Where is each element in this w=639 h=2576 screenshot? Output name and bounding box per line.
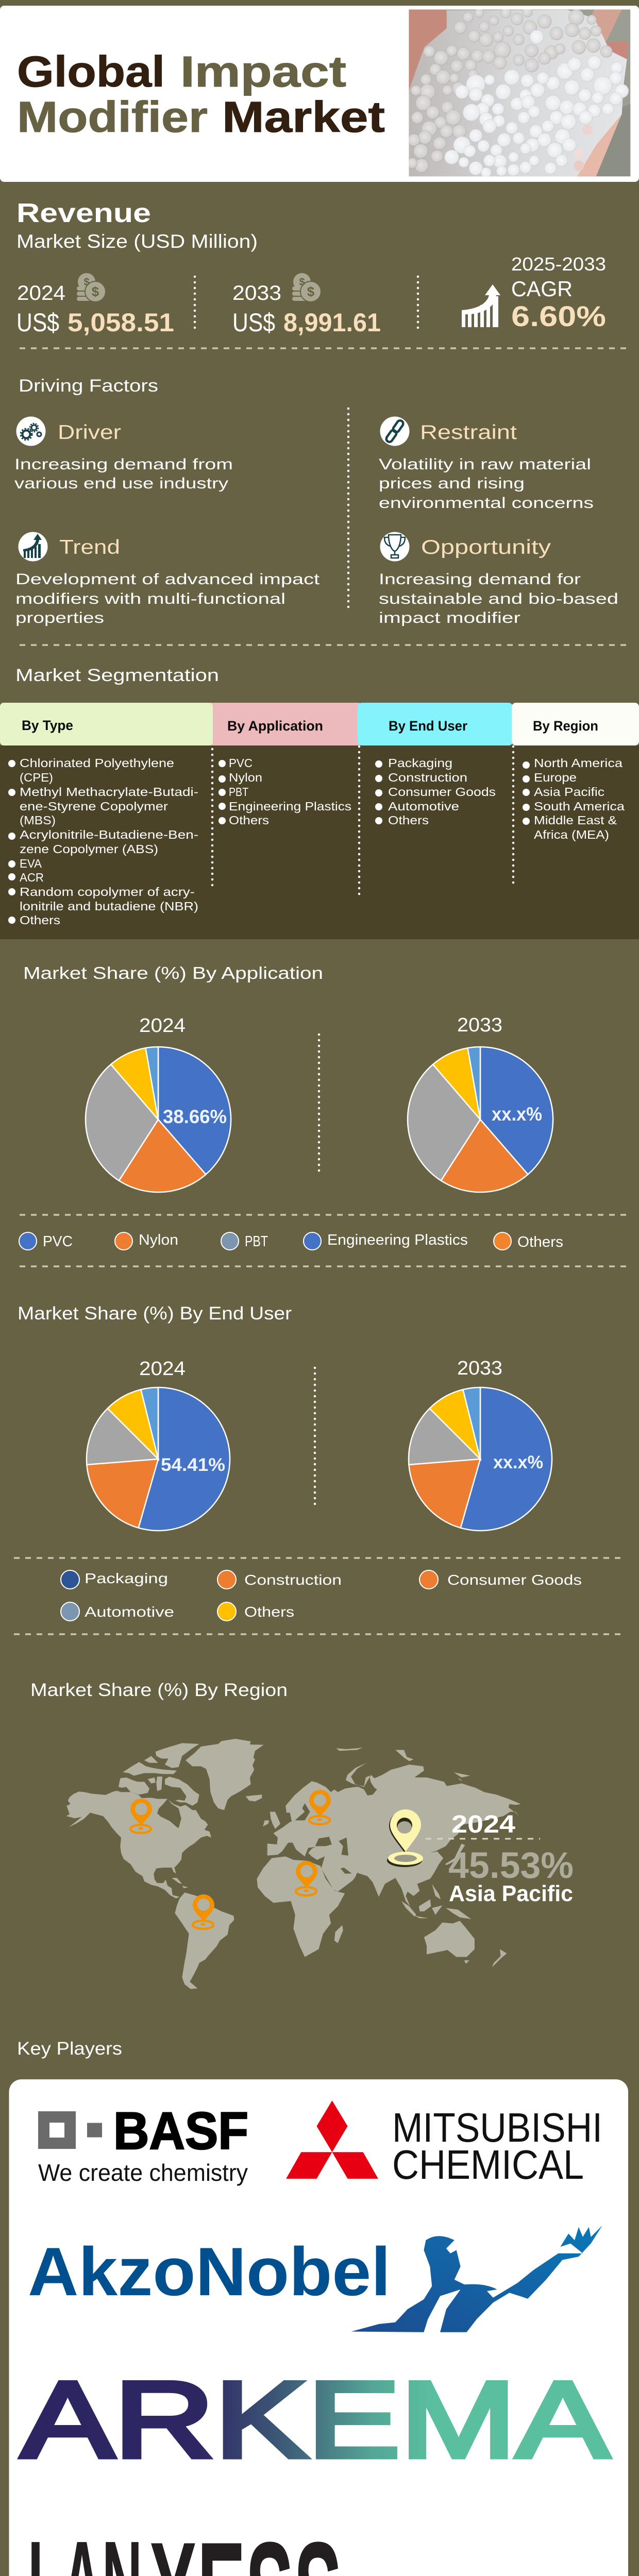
logo: Mitsubishi Chemical: MITSUBISHI	[392, 2105, 602, 2150]
text: opportunity body: sustainable and bio-based	[379, 590, 618, 607]
heading: by end user: Market Share (%) By End User	[18, 1303, 292, 1324]
column: by application: PVC	[229, 756, 253, 770]
panel: market share by region	[30, 1680, 574, 1989]
pie chart: application 2024: 38.66%	[163, 1106, 227, 1127]
icon: trend	[19, 532, 47, 562]
stat: 2024 revenue: 5,058.51	[68, 308, 174, 337]
pin: middle east and africa	[296, 1861, 317, 1895]
text: trend body: Development of advanced impact	[15, 571, 320, 588]
pie chart: end user 2033	[409, 1387, 552, 1531]
stat: 2033 revenue: 8,991.61	[283, 308, 381, 337]
pin: europe	[309, 1790, 331, 1824]
card: logos	[9, 2079, 628, 2576]
icon: coins 2033: $	[299, 277, 305, 288]
heading: revenue: Revenue	[16, 198, 151, 228]
column: by type: ACR	[20, 871, 44, 884]
panel: key players	[9, 2039, 628, 2576]
pin: north america	[130, 1799, 152, 1833]
panel: driving factors	[14, 376, 618, 626]
column: by end user: Automotive	[388, 800, 459, 813]
heading: market segmentation: Market Segmentation	[15, 666, 219, 685]
legend: application: Engineering Plastics	[327, 1232, 468, 1248]
stat: CAGR: CAGR	[511, 277, 573, 301]
column: by end user: Others	[388, 814, 429, 827]
text: driver body: Increasing demand from	[14, 456, 233, 473]
world map	[66, 1739, 521, 1989]
text: restraint body	[379, 456, 594, 512]
stat: 2033 revenue: US$	[232, 308, 275, 337]
panel: market segmentation	[0, 666, 639, 939]
logo: Mitsubishi Chemical	[286, 2100, 602, 2188]
pin: asia pacific highlighted	[387, 1809, 423, 1867]
panel: market share by end user	[14, 1303, 624, 1621]
callout: asia pacific share: 45.53%	[448, 1845, 574, 1886]
column: by type: (MBS)	[20, 814, 56, 827]
title	[17, 47, 385, 141]
column: by region: Middle East &	[534, 814, 617, 827]
label: driver: Driver	[58, 421, 121, 444]
column: by region: By Region	[533, 718, 598, 734]
photo: white polymer pellets in a hand	[407, 7, 630, 178]
logo: BASF	[38, 2102, 248, 2186]
column: by region	[523, 718, 625, 841]
panel: header	[0, 6, 639, 182]
column: by end user: Construction	[388, 771, 467, 784]
stat: CAGR: 6.60%	[511, 300, 606, 332]
column: by application: Nylon	[229, 771, 262, 784]
year label 2033: 2033	[457, 1014, 502, 1036]
stat: 2033 revenue	[232, 282, 381, 337]
hudson bay hole	[158, 1806, 181, 1828]
column: by region: Asia Pacific	[534, 785, 604, 799]
logo: Arkema: ARKEMA	[21, 2359, 609, 2480]
column: by end user: Packaging	[388, 756, 452, 770]
text: opportunity body	[379, 571, 618, 626]
stat: 2024 revenue: 2024	[17, 282, 65, 304]
year label 2024: 2024	[139, 1015, 186, 1037]
text: restraint body: Volatility in raw material	[379, 456, 591, 473]
logo: Lanxess	[28, 2510, 342, 2576]
column: by type: Random copolymer of acry-	[20, 885, 195, 899]
column: by type: Others	[20, 913, 60, 927]
icon: coins 2024: $	[83, 277, 90, 288]
stat: 2033 revenue: 2033	[232, 282, 281, 304]
icon: coins 2024	[77, 273, 106, 302]
stat: 2024 revenue	[16, 282, 174, 337]
logo: AkzoNobel: AkzoNobel	[28, 2234, 391, 2310]
pin: south america	[193, 1894, 214, 1929]
pie chart: end user 2024: 54.41%	[161, 1455, 225, 1475]
heading: by region: Market Share (%) By Region	[30, 1680, 288, 1700]
column: by type: Methyl Methacrylate-Butadi-	[20, 785, 198, 799]
column: by type: zene Copolymer (ABS)	[20, 842, 158, 856]
text: driver body: various end use industry	[14, 475, 228, 492]
callout: asia pacific share: Asia Pacific	[449, 1881, 573, 1906]
legend: end user: Consumer Goods	[447, 1572, 582, 1588]
stat: CAGR: 2025-2033	[511, 253, 606, 275]
heading: key players: Key Players	[17, 2039, 122, 2059]
column: by type: EVA	[20, 857, 42, 870]
column: by application: Engineering Plastics	[229, 800, 351, 813]
trend block	[15, 532, 320, 626]
text: driver body	[14, 456, 233, 492]
column: by type: By Type	[22, 718, 73, 733]
icon: coins 2033	[292, 273, 321, 302]
text: trend body	[15, 571, 320, 626]
year label 2024: 2024	[139, 1358, 186, 1380]
legend: end user: Automotive	[85, 1604, 174, 1620]
text: restraint body: environmental concerns	[379, 495, 594, 512]
column: by type	[8, 718, 198, 927]
column: by application: PBT	[229, 785, 248, 799]
text: opportunity body: impact modifier	[379, 609, 520, 626]
label: opportunity: Opportunity	[421, 536, 551, 558]
driver block	[14, 416, 233, 492]
callout: asia pacific share: 2024	[451, 1811, 515, 1838]
legend: application: Others	[517, 1234, 563, 1250]
stat: 2024 revenue: US$	[16, 308, 59, 337]
title: Impact	[180, 47, 346, 96]
legend: end user: Others	[244, 1604, 294, 1620]
label: trend: Trend	[59, 536, 120, 558]
column: by region: Africa (MEA)	[534, 828, 609, 841]
text: trend body: properties	[15, 609, 104, 626]
column: by type: lonitrile and butadiene (NBR)	[20, 900, 198, 913]
pie chart: application 2024	[86, 1047, 231, 1192]
column: by type: Acrylonitrile-Butadiene-Ben-	[20, 828, 198, 841]
callout: asia pacific share	[426, 1811, 574, 1906]
title: Market	[222, 93, 385, 141]
column: by region: North America	[534, 756, 623, 770]
column: by region: Europe	[534, 771, 577, 784]
legend: end user: Construction	[244, 1572, 342, 1588]
column: by application	[218, 718, 351, 827]
text: trend body: modifiers with multi-functional	[15, 590, 285, 607]
pie chart: end user 2024	[87, 1387, 230, 1531]
legend: application: PBT	[245, 1233, 268, 1250]
logo: Mitsubishi Chemical: CHEMICAL	[392, 2142, 584, 2188]
logo: BASF: BASF	[113, 2102, 248, 2160]
panel: market share by application	[19, 963, 629, 1250]
title: Modifier	[17, 93, 208, 141]
column: by application: By Application	[227, 718, 323, 734]
legend: application: PVC	[43, 1233, 73, 1250]
panel: revenue	[16, 198, 606, 337]
legend: end user: Packaging	[85, 1570, 168, 1586]
label: restraint: Restraint	[420, 421, 517, 444]
legend: application	[19, 1232, 563, 1250]
logo: BASF: We create chemistry	[38, 2159, 248, 2186]
restraint block	[379, 416, 594, 512]
column: by region: South America	[534, 800, 625, 813]
column: by type: Chlorinated Polyethylene	[20, 756, 174, 770]
stat: CAGR	[511, 253, 606, 332]
pie chart: end user 2033: xx.x%	[493, 1452, 543, 1472]
icon: trophy	[380, 532, 409, 562]
pie chart: application 2033	[408, 1047, 553, 1192]
subheading: market size: Market Size (USD Million)	[16, 231, 258, 252]
pie chart: application 2033: xx.x%	[492, 1104, 542, 1125]
text: opportunity body: Increasing demand for	[379, 571, 581, 588]
column: by end user: By End User	[389, 718, 467, 734]
text: restraint body: prices and rising	[379, 475, 525, 492]
icon: coins 2024: $	[92, 284, 99, 299]
year label 2033: 2033	[457, 1358, 502, 1379]
icon: chain	[380, 416, 409, 446]
logo: AkzoNobel	[28, 2225, 602, 2332]
column: by end user	[375, 718, 496, 827]
column: by type: (CPE)	[20, 771, 53, 784]
legend: application: Nylon	[139, 1232, 178, 1248]
icon: gears	[16, 416, 45, 446]
opportunity block	[379, 532, 618, 626]
column: by end user: Consumer Goods	[388, 785, 496, 799]
column: by application: Others	[229, 814, 269, 827]
legend: end user	[61, 1570, 582, 1621]
heading: driving factors: Driving Factors	[19, 376, 158, 396]
column: by type: ene-Styrene Copolymer	[20, 800, 168, 813]
icon: growth arrow	[462, 284, 500, 327]
heading: by application: Market Share (%) By Application	[23, 963, 323, 982]
title: Global	[17, 47, 165, 96]
icon: coins 2033: $	[307, 284, 315, 299]
